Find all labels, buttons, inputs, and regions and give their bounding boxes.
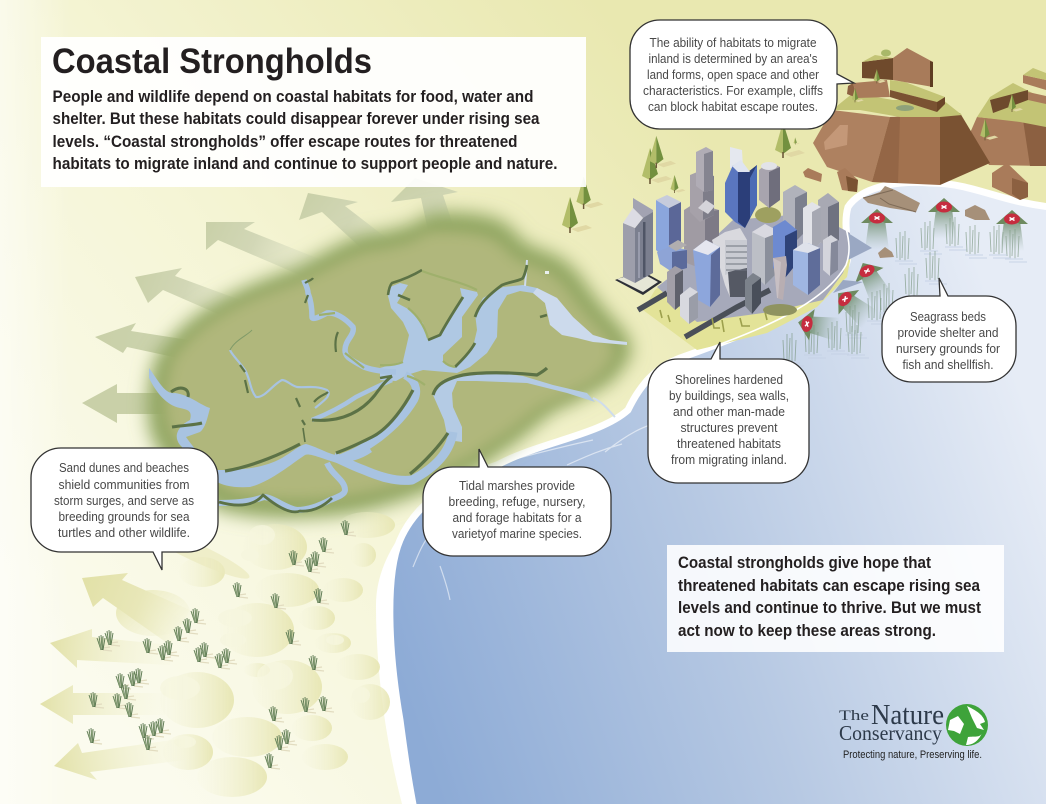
panel: open water xyxy=(376,182,1046,804)
cliff main xyxy=(813,48,990,185)
building: light blue tower xyxy=(793,242,820,295)
boulders on beach xyxy=(803,163,1028,200)
building: dark blue tower xyxy=(725,147,757,228)
callout: sand dunes: shield communities from xyxy=(58,477,190,492)
callout: seagrass: provide shelter and xyxy=(898,325,998,340)
building: domed tower xyxy=(759,162,780,208)
callout: cliffs: land forms, open space and other xyxy=(647,67,820,82)
callout: tidal marshes: Tidal marshes provide xyxy=(459,478,575,493)
callout: tidal marshes: varietyof marine species. xyxy=(452,526,582,541)
callout: sand dunes: turtles and other wildlife. xyxy=(58,525,190,540)
building: mid cluster xyxy=(752,220,797,285)
city ground xyxy=(638,207,872,358)
marsh water channels xyxy=(149,260,627,510)
callout: seagrass: nursery grounds for xyxy=(896,341,1001,356)
callout: cliffs: The ability of habitats to migrate xyxy=(650,35,816,50)
logo: The Nature Conservancy: Conservancy xyxy=(839,721,942,745)
panel: conclusion: levels and continue to thrive. But we must xyxy=(678,599,981,617)
cliff right xyxy=(970,68,1046,166)
building: dark tower xyxy=(745,273,761,314)
building: blue tower xyxy=(656,195,681,262)
callout: seagrass xyxy=(882,278,1016,382)
intro text: shelter. But these habitats could disappear forever under rising sea xyxy=(52,110,540,128)
building: east small tower xyxy=(823,235,838,276)
callout: seagrass: Seagrass beds xyxy=(910,309,986,324)
building: south-west towers xyxy=(667,266,698,324)
building: low blue block xyxy=(657,240,687,272)
dune crescent highlights xyxy=(160,525,370,748)
building: pink tower xyxy=(773,256,787,300)
dune grass xyxy=(87,520,356,769)
seagrass rocks xyxy=(863,186,990,258)
callout: shorelines xyxy=(648,342,809,483)
callout: seagrass: fish and shellfish. xyxy=(902,357,994,372)
callout: cliffs: inland is determined by an area's xyxy=(648,51,818,66)
building: striped tower xyxy=(712,228,747,297)
callout: cliffs: can block habitat escape routes. xyxy=(648,99,818,114)
water streaks xyxy=(413,370,800,600)
panel: conclusion: Coastal strongholds give hope that xyxy=(678,554,931,572)
callout: cliffs xyxy=(630,20,854,129)
callout: sand dunes: Sand dunes and beaches xyxy=(59,460,189,475)
intro text: levels. “Coastal strongholds” offer escape routes for threatened xyxy=(52,133,518,151)
tidal marsh xyxy=(148,212,632,518)
tidal marsh escape arrows xyxy=(82,178,458,423)
seagrass beds xyxy=(782,217,1027,366)
threat markers xyxy=(795,198,1028,345)
callout: sand dunes xyxy=(31,448,218,570)
callout: sand dunes: breeding grounds for sea xyxy=(58,509,190,524)
icon: oak leaf globe xyxy=(946,704,988,746)
callout: tidal marshes: breeding, refuge, nursery, xyxy=(448,494,586,509)
city xyxy=(615,147,872,358)
callout: shorelines: Shorelines hardened xyxy=(675,372,783,387)
sand dunes xyxy=(116,512,395,797)
building: east back towers xyxy=(783,185,839,252)
marsh channel banks xyxy=(171,265,549,512)
intro text: People and wildlife depend on coastal habitats for food, water and xyxy=(52,88,534,106)
logo: The Nature Conservancy: Nature xyxy=(871,700,944,731)
panel: conclusion: act now to keep these areas strong. xyxy=(678,622,936,640)
building: periwinkle tower xyxy=(693,240,720,307)
cliffs xyxy=(803,48,1046,200)
callout: cliffs: characteristics. For example, cliffs xyxy=(643,83,823,98)
panel: title and intro xyxy=(41,37,586,187)
logo: The Nature Conservancy: Protecting nature, Preserving life. xyxy=(843,749,982,761)
callout: shorelines: and other man-made xyxy=(673,404,785,419)
callout: shorelines: structures prevent xyxy=(680,420,778,435)
building: tiered tower xyxy=(684,147,719,270)
panel: conclusion xyxy=(667,545,1004,652)
callout: tidal marshes: and forage habitats for a xyxy=(452,510,582,525)
callout: tidal marshes xyxy=(423,449,611,556)
title: Coastal Strongholds xyxy=(52,42,372,81)
dune escape arrows xyxy=(40,573,190,780)
intro text: habitats to migrate inland and continue to support people and nature. xyxy=(52,155,558,173)
intro text xyxy=(52,88,558,173)
logo: The Nature Conservancy: The xyxy=(839,708,869,724)
panel: conclusion: threatened habitats can escape rising sea xyxy=(678,577,981,595)
callout: shorelines: threatened habitats xyxy=(677,436,781,451)
callout: sand dunes: storm surges, and serve as xyxy=(54,493,194,508)
trees xyxy=(562,69,1023,233)
callout: shorelines: from migrating inland. xyxy=(671,452,787,467)
logo: The Nature Conservancy xyxy=(839,700,988,761)
building: left tower xyxy=(615,198,662,295)
callout: shorelines: by buildings, sea walls, xyxy=(669,388,789,403)
